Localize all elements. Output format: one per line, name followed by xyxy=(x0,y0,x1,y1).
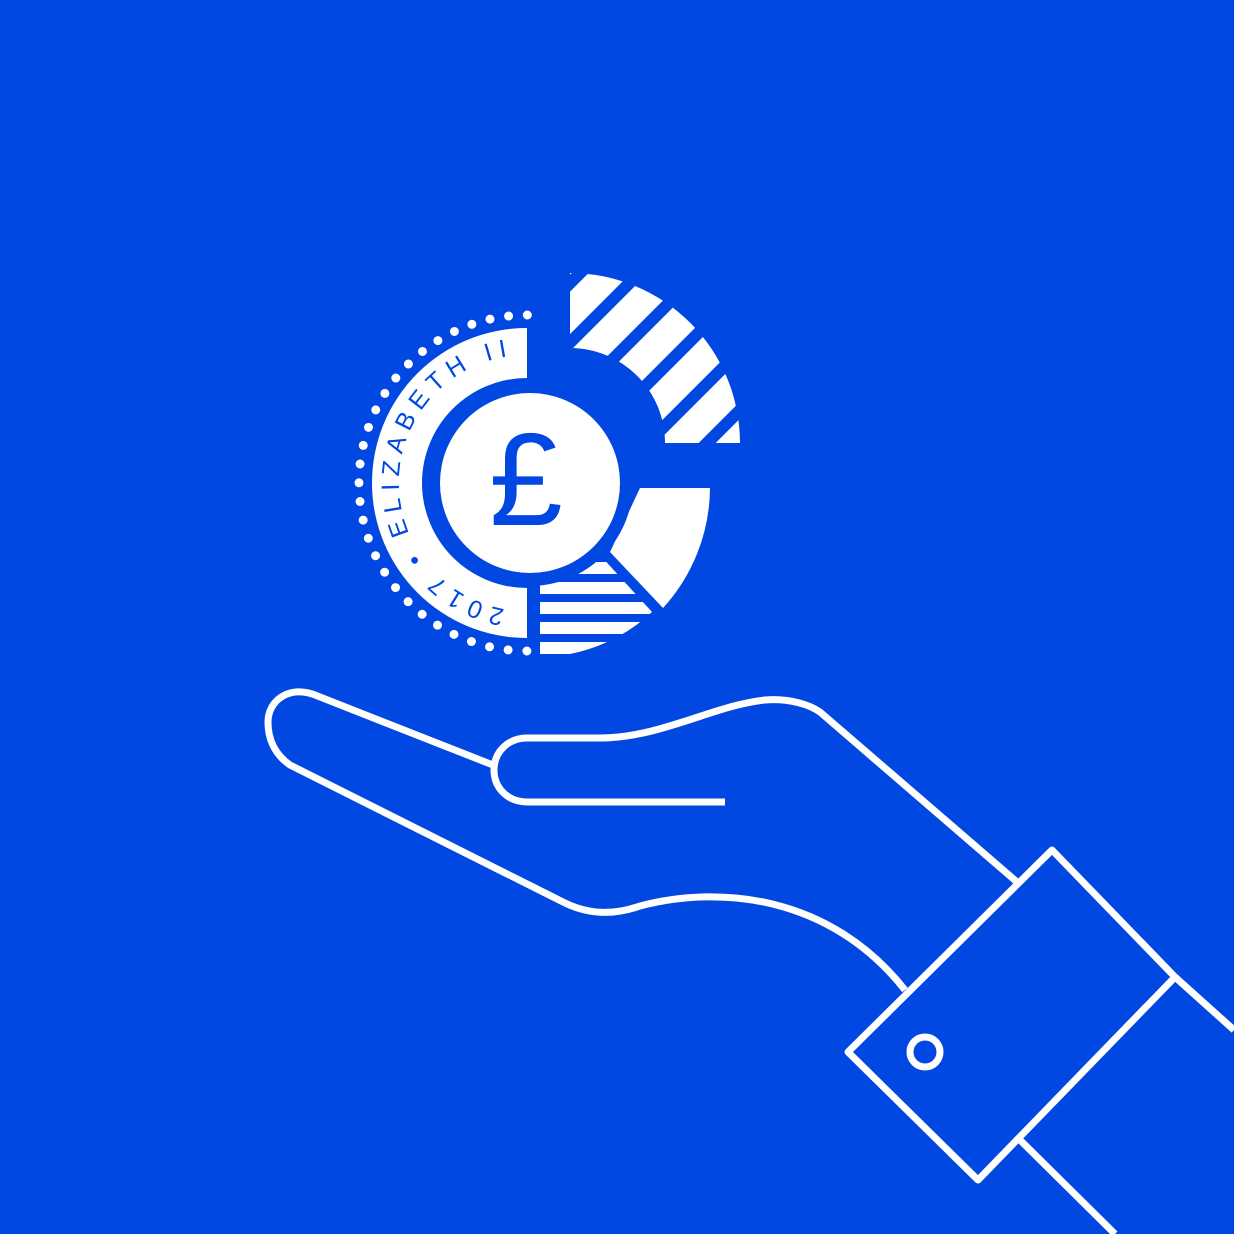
coin: centre with pound sign xyxy=(440,393,620,573)
coin: left band with inscription xyxy=(372,328,527,638)
coin xyxy=(354,273,740,656)
infographic canvas xyxy=(264,273,1234,1234)
hand xyxy=(268,692,1234,1234)
cuff xyxy=(848,850,1175,1180)
coin: top-right striped segment xyxy=(570,273,740,443)
coin: bottom horizontal-striped segment xyxy=(540,555,652,657)
hand: index finger and back of hand xyxy=(494,700,1017,882)
coin: dotted outer ring xyxy=(359,300,733,670)
cuff button xyxy=(910,1037,940,1067)
coin: right solid segment xyxy=(610,488,710,608)
coin: centre with pound sign: £ xyxy=(489,406,563,553)
inscription text: 2017 • ELIZABETH II xyxy=(382,340,506,625)
hand: thumb and palm underside xyxy=(268,692,905,990)
sleeve xyxy=(1020,977,1234,1234)
